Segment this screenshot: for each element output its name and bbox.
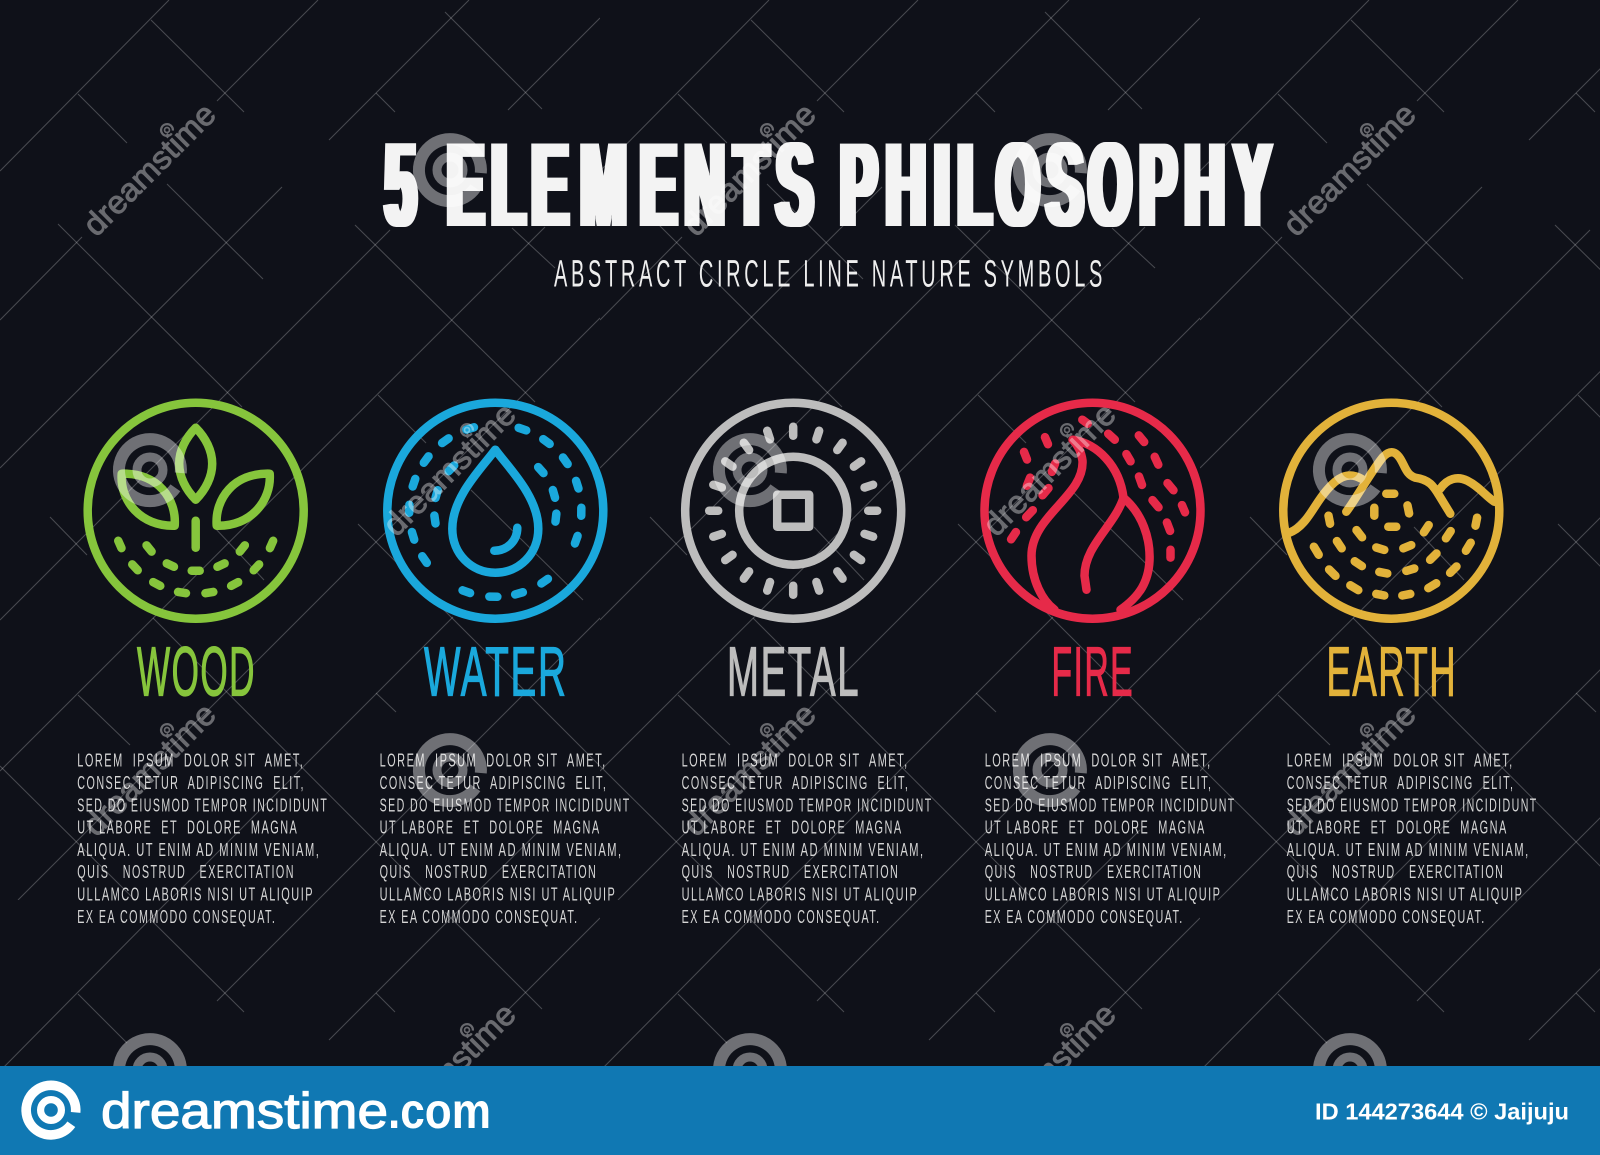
text block: fire: UT LABORE ET DOLORE MAGNA [985, 817, 1206, 838]
text block: wood: ALIQUA. UT ENIM AD MINIM VENIAM, [77, 839, 320, 860]
text block: water: UT LABORE ET DOLORE MAGNA [380, 817, 601, 838]
text block: earth [1287, 750, 1538, 927]
banner logo text: dreamstime [101, 1083, 388, 1139]
text block: fire: QUIS NOSTRUD EXERCITATION [985, 861, 1202, 882]
banner logo text [101, 1083, 491, 1139]
panel: earth [1283, 403, 1538, 927]
text block: fire: ULLAMCO LABORIS NISI UT ALIQUIP [985, 884, 1221, 904]
text block: water: LOREM IPSUM DOLOR SIT AMET, [380, 750, 607, 771]
watermark: wordmarks: dreamstime [976, 396, 1123, 543]
text block: metal: QUIS NOSTRUD EXERCITATION [682, 861, 899, 882]
watermark: wordmarks: dreamstime [1276, 696, 1423, 843]
text block: fire: LOREM IPSUM DOLOR SIT AMET, [985, 750, 1212, 771]
text block: fire: SED DO EIUSMOD TEMPOR INCIDIDUNT [985, 794, 1236, 815]
panel: wood [77, 403, 328, 927]
watermark: wordmarks: dreamstime [676, 96, 823, 243]
panel: water [380, 403, 631, 927]
text block: water: QUIS NOSTRUD EXERCITATION [380, 861, 597, 882]
text block: wood: UT LABORE ET DOLORE MAGNA [77, 817, 298, 838]
watermark: spirals [119, 139, 1381, 1101]
text block: metal: ULLAMCO LABORIS NISI UT ALIQUIP [682, 884, 918, 904]
panel: fire [984, 403, 1236, 927]
title: 5 ELEMENTS PHILOSOPHY [385, 117, 1271, 252]
text block: wood: SED DO EIUSMOD TEMPOR INCIDIDUNT [77, 794, 328, 815]
icon: wood leaves in circle [88, 403, 304, 619]
label: metal: METAL [727, 632, 860, 710]
text block: metal [682, 750, 933, 927]
text block: fire: ALIQUA. UT ENIM AD MINIM VENIAM, [985, 839, 1228, 860]
watermark: wordmarks: dreamstime [376, 996, 523, 1143]
footer banner [0, 1066, 1600, 1155]
watermark: wordmarks: dreamstime [1276, 96, 1423, 243]
panel: metal [682, 403, 933, 927]
text block: metal: LOREM IPSUM DOLOR SIT AMET, [682, 750, 909, 771]
label: wood: WOOD [137, 632, 256, 710]
watermark: wordmarks: dreamstime [76, 696, 223, 843]
text block: fire: CONSEC TETUR ADIPISCING ELIT, [985, 772, 1212, 793]
text block: water: ULLAMCO LABORIS NISI UT ALIQUIP [380, 884, 616, 904]
watermark: wordmarks: dreamstime [376, 396, 523, 543]
icon: fire flame in circle [984, 403, 1200, 619]
icon: water drop in circle [387, 403, 603, 619]
text block: water: CONSEC TETUR ADIPISCING ELIT, [380, 772, 607, 793]
text block: water: SED DO EIUSMOD TEMPOR INCIDIDUNT [380, 794, 631, 815]
banner logo text: .com [388, 1083, 491, 1139]
text block: wood [77, 750, 328, 927]
image id credit: ID 144273644 © Jaijuju [1315, 1098, 1569, 1124]
label: water: WATER [424, 632, 568, 710]
text block: water: ALIQUA. UT ENIM AD MINIM VENIAM, [380, 839, 623, 860]
text block: metal: UT LABORE ET DOLORE MAGNA [682, 817, 903, 838]
watermark: wordmarks: dreamstime [676, 696, 823, 843]
text block: wood: EX EA COMMODO CONSEQUAT. [77, 906, 276, 927]
icon: dreamstime spiral logo [26, 1085, 76, 1135]
text block: fire [985, 750, 1236, 927]
text block: wood: LOREM IPSUM DOLOR SIT AMET, [77, 750, 304, 771]
text block: metal: CONSEC TETUR ADIPISCING ELIT, [682, 772, 909, 793]
text block: water: EX EA COMMODO CONSEQUAT. [380, 906, 579, 927]
text block: metal: EX EA COMMODO CONSEQUAT. [682, 906, 881, 927]
text block: metal: SED DO EIUSMOD TEMPOR INCIDIDUNT [682, 794, 933, 815]
icon: metal coin in circle [685, 403, 901, 619]
text block: water [380, 750, 631, 927]
text block: wood: ULLAMCO LABORIS NISI UT ALIQUIP [77, 884, 314, 904]
text block: fire: EX EA COMMODO CONSEQUAT. [985, 906, 1184, 927]
panel: fire: FIRE [1052, 632, 1134, 710]
text block: metal: ALIQUA. UT ENIM AD MINIM VENIAM, [682, 839, 925, 860]
label: earth: EARTH [1326, 632, 1457, 710]
text block: wood: QUIS NOSTRUD EXERCITATION [77, 861, 295, 882]
watermark: wordmarks: dreamstime [976, 996, 1123, 1143]
watermark: wordmarks: dreamstime [76, 96, 223, 243]
watermark: wordmarks [76, 96, 1423, 1143]
text block: wood: CONSEC TETUR ADIPISCING ELIT, [77, 772, 305, 793]
icon: earth mountain in circle [1283, 403, 1499, 619]
subtitle: ABSTRACT CIRCLE LINE NATURE SYMBOLS [554, 254, 1106, 296]
